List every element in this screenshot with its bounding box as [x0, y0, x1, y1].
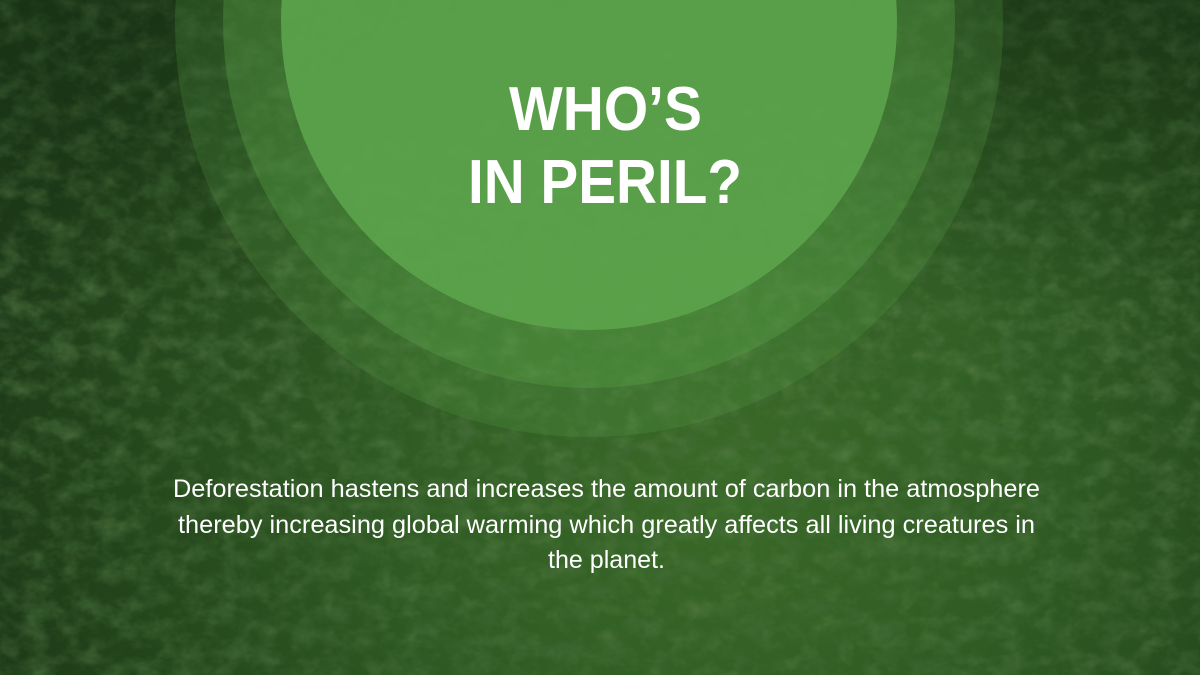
middle translucent circle	[223, 0, 955, 388]
description text: thereby increasing global warming which greatly affects all living creatures in	[178, 511, 1035, 539]
description text: Deforestation hastens and increases the amount of carbon in the atmosphere	[173, 475, 1040, 503]
description text: the planet.	[548, 546, 665, 574]
title	[468, 75, 742, 217]
inner circle	[281, 0, 897, 330]
title: WHO’S	[509, 75, 702, 144]
title: IN PERIL?	[468, 148, 742, 217]
outer translucent circle	[175, 0, 1003, 437]
description text	[173, 475, 1040, 574]
concentric circles	[175, 0, 1003, 437]
